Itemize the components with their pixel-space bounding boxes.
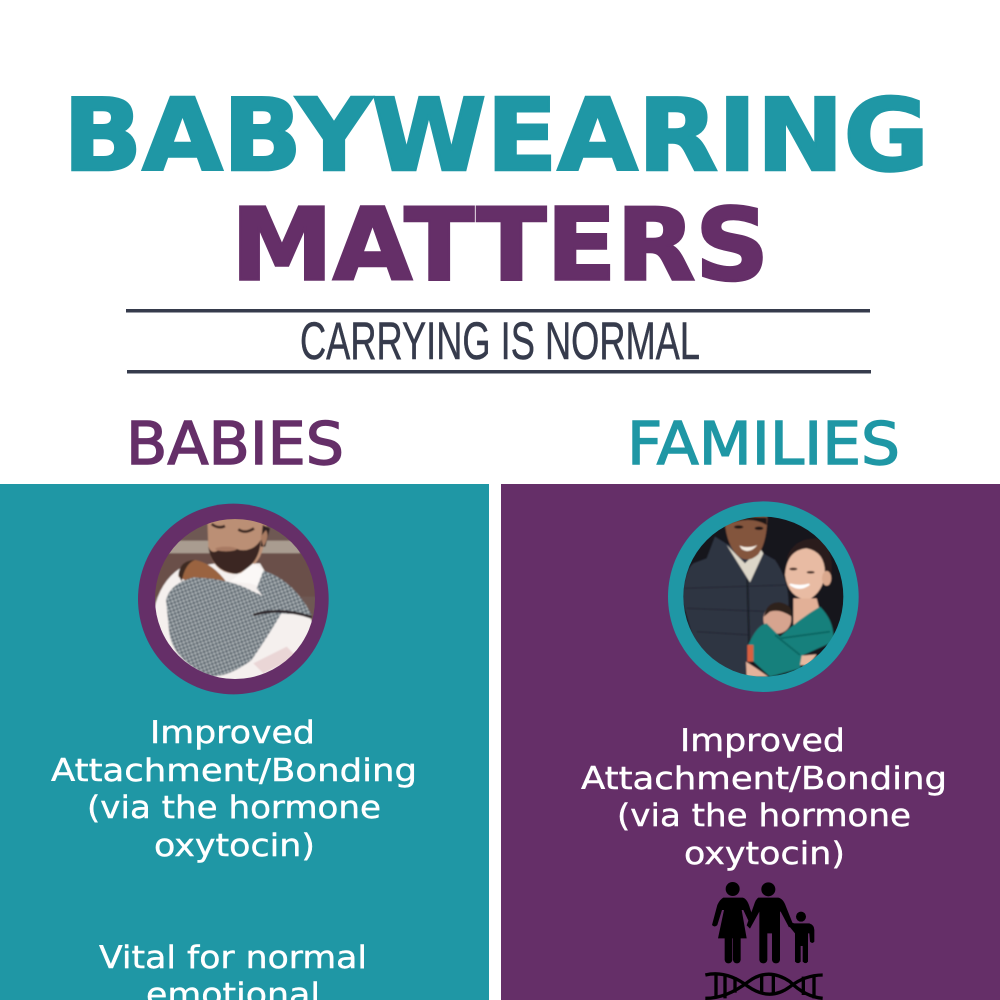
text: improved attachment: Improved xyxy=(150,715,315,751)
text: improved attachment: Attachment/Bonding xyxy=(581,761,947,797)
heading: babies: BABIES xyxy=(126,409,344,478)
text: improved attachment: Improved xyxy=(680,723,845,759)
title: BABYWEARING MATTERS: MATTERS xyxy=(231,186,769,304)
subtitle: carrying is normal xyxy=(126,309,871,374)
text: vital for normal emotional: Vital for normal xyxy=(99,940,367,976)
text: improved attachment: (via the hormone xyxy=(617,798,911,834)
photo: father wearing baby in a woven sling xyxy=(138,504,329,694)
text: improved attachment xyxy=(581,723,947,872)
title: BABYWEARING MATTERS: BABYWEARING xyxy=(63,77,929,194)
photo: couple with baby in a green wrap xyxy=(668,501,859,692)
text: improved attachment: Attachment/Bonding xyxy=(51,753,417,789)
panel: families xyxy=(501,484,1000,1000)
heading: families: FAMILIES xyxy=(627,409,900,478)
text: improved attachment xyxy=(51,715,417,864)
title: BABYWEARING MATTERS xyxy=(63,77,929,304)
text: improved attachment: (via the hormone xyxy=(87,790,381,826)
subtitle: carrying is normal: CARRYING IS NORMAL xyxy=(300,312,700,371)
text: vital for normal emotional xyxy=(99,940,367,1000)
icon: family and DNA helix xyxy=(705,882,823,998)
text: improved attachment: oxytocin) xyxy=(154,828,315,864)
panel: babies xyxy=(0,484,489,1000)
text: improved attachment: oxytocin) xyxy=(684,836,845,872)
